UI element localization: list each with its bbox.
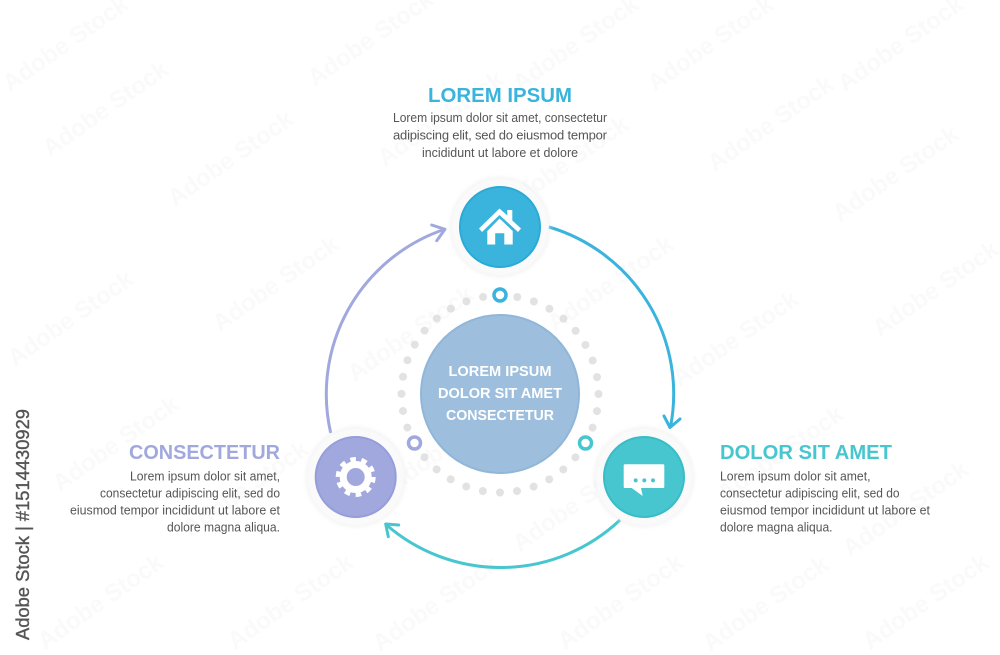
arrow: top to right <box>549 227 680 428</box>
central text: LOREM IPSUM <box>448 364 552 380</box>
stock id label: Adobe Stock | #1514430929 <box>12 409 33 640</box>
watermark pattern: Adobe Stock <box>838 455 974 562</box>
watermark pattern: Adobe Stock <box>163 105 299 212</box>
central circle <box>421 315 579 473</box>
heading: left: CONSECTETUR <box>129 442 281 464</box>
central text <box>438 364 562 424</box>
ring marker: blue <box>494 289 506 301</box>
watermark pattern: Adobe Stock <box>868 235 1000 342</box>
body: right: eiusmod tempor incididunt ut labore et <box>720 502 930 517</box>
text block: left <box>70 442 281 534</box>
watermark pattern: Adobe Stock <box>383 390 519 497</box>
dotted ring <box>402 296 598 492</box>
body: left: Lorem ipsum dolor sit amet, <box>130 468 280 483</box>
watermark pattern: Adobe Stock <box>703 70 839 177</box>
central text: DOLOR SIT AMET <box>438 386 562 402</box>
watermark pattern: Adobe Stock <box>368 550 504 655</box>
node: home <box>450 177 550 277</box>
watermark pattern: Adobe Stock <box>698 550 834 655</box>
node: chat <box>594 427 694 527</box>
icon: house <box>479 208 521 244</box>
watermark pattern: Adobe Stock <box>343 280 479 387</box>
watermark pattern: Adobe Stock <box>38 55 174 162</box>
body: right: consectetur adipiscing elit, sed do <box>720 485 900 500</box>
watermark pattern: Adobe Stock <box>178 435 314 542</box>
watermark pattern: Adobe Stock <box>48 390 184 497</box>
ring marker: teal <box>580 437 592 449</box>
watermark pattern: Adobe Stock <box>33 548 169 655</box>
ring marker: purple <box>408 437 420 449</box>
watermark pattern: Adobe Stock <box>3 265 139 372</box>
body: top: Lorem ipsum dolor sit amet, consectetur <box>393 110 608 125</box>
body: top: adipiscing elit, sed do eiusmod tempor <box>393 128 608 142</box>
heading: top: LOREM IPSUM <box>428 85 572 107</box>
body: left: dolore magna aliqua. <box>167 519 280 534</box>
node: gear <box>306 427 406 527</box>
watermark pattern: Adobe Stock <box>553 548 689 655</box>
body: top <box>393 110 608 160</box>
watermark pattern: Adobe Stock <box>543 230 679 337</box>
watermark pattern: Adobe Stock <box>508 450 644 557</box>
body: right: Lorem ipsum dolor sit amet, <box>720 468 870 483</box>
central text: CONSECTETUR <box>446 408 555 424</box>
body: top: incididunt ut labore et dolore <box>422 145 578 160</box>
arrow: right to left <box>386 520 620 568</box>
watermark pattern: Adobe Stock <box>208 230 344 337</box>
watermark pattern: Adobe Stock <box>828 120 964 227</box>
heading: right: DOLOR SIT AMET <box>720 442 892 464</box>
icon: speech bubble <box>624 464 664 496</box>
watermark pattern: Adobe Stock <box>858 548 994 655</box>
watermark pattern: Adobe Stock <box>373 65 509 172</box>
watermark pattern: Adobe Stock <box>498 110 634 217</box>
body: left <box>70 468 280 534</box>
body: left: consectetur adipiscing elit, sed do <box>100 485 280 500</box>
arrow: left to top <box>326 225 445 433</box>
body: left: eiusmod tempor incididunt ut labore et <box>70 502 280 517</box>
text block: top <box>393 85 608 160</box>
body: right <box>720 468 930 534</box>
text block: right <box>720 442 930 534</box>
watermark pattern: Adobe Stock <box>223 548 359 655</box>
body: right: dolore magna aliqua. <box>720 519 832 534</box>
watermark pattern: Adobe Stock <box>668 285 804 392</box>
watermark pattern: Adobe Stock <box>713 400 849 507</box>
icon: gear <box>338 460 373 494</box>
